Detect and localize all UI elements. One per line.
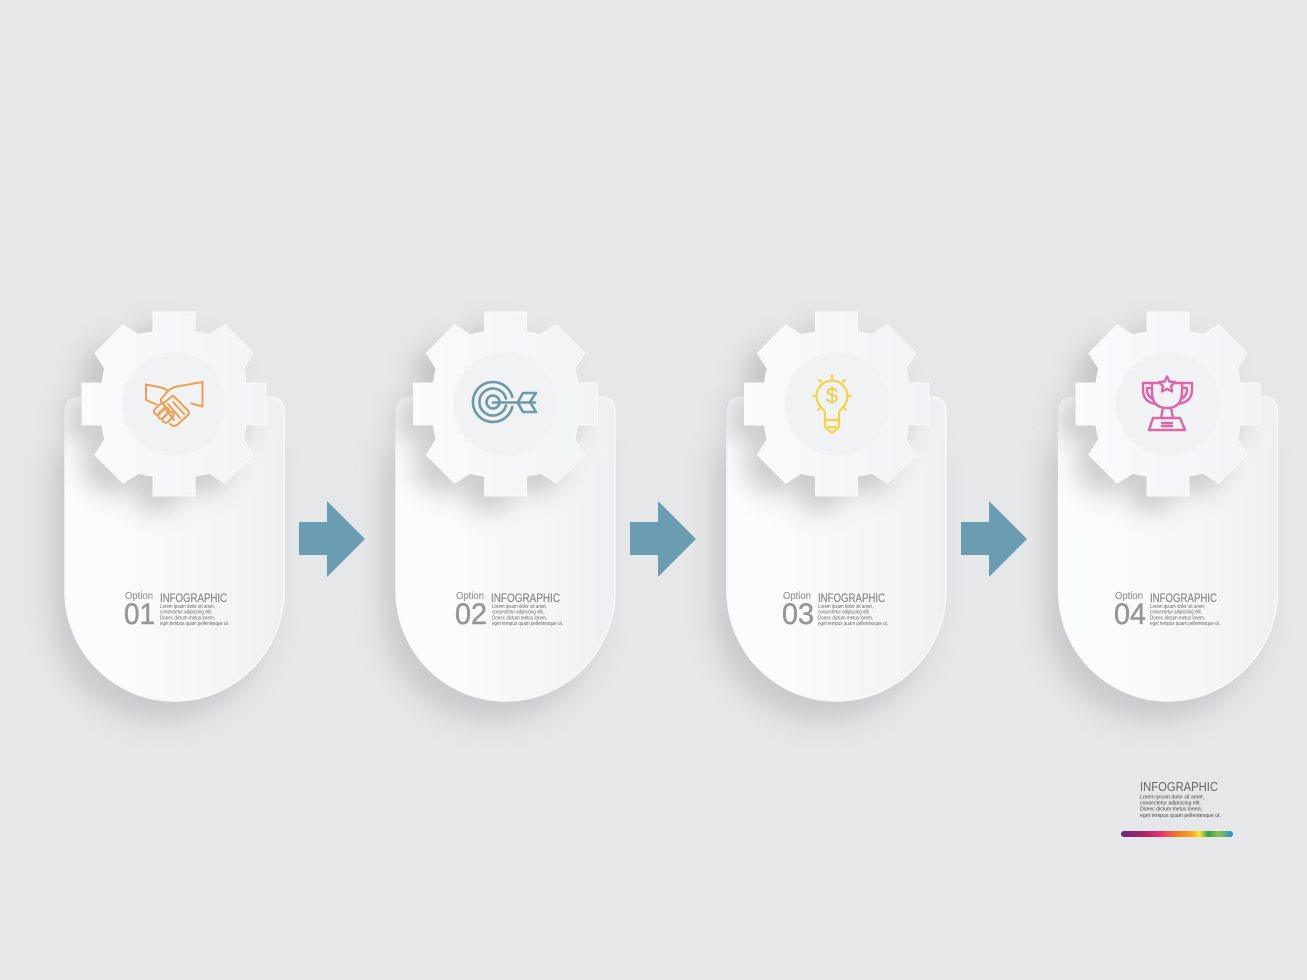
icon: light bulb with dollar: $ [826, 383, 838, 408]
gear 1 [65, 312, 266, 511]
text: option 4: Lorem ipsum dolor sit amet, [1150, 604, 1205, 610]
text: option 2: 02 [455, 598, 487, 631]
step 3 [714, 312, 946, 721]
icon: handshake [146, 382, 202, 426]
panel: card 3 [714, 397, 946, 721]
text: option 3: Lorem ipsum dolor sit amet, [818, 604, 873, 610]
step 4 [1046, 312, 1278, 721]
text: option 3: Donec dictum metus lorem, [818, 616, 873, 622]
text: option 3: INFOGRAPHIC [818, 593, 885, 605]
arrow 3 [961, 501, 1027, 577]
panel: card 4 [1046, 397, 1278, 721]
legend text: Donec dictum metus lorem, [1140, 806, 1202, 812]
step 1 [52, 312, 284, 721]
text: option 3: eget tempus quam pellentesque ut. [818, 621, 888, 627]
arrow 1 [299, 501, 365, 577]
text: option 4: consectetur adipiscing elit. [1150, 610, 1202, 616]
text: option 2 [455, 591, 563, 631]
gear 4 [1059, 312, 1260, 511]
panel: card 2 [383, 397, 615, 721]
text: option 4: INFOGRAPHIC [1150, 593, 1217, 605]
gear 2 [396, 312, 598, 511]
gear 3 [728, 312, 928, 511]
rainbow bar [1121, 831, 1233, 837]
text: option 3: Option [783, 591, 811, 602]
legend block [1121, 780, 1233, 837]
text: option 4 [1114, 591, 1220, 631]
legend text: consectetur adipiscing elit. [1140, 800, 1201, 806]
text: option 1: Donec dictum metus lorem, [160, 616, 215, 622]
text: option 2: consectetur adipiscing elit. [492, 610, 544, 616]
text: option 3: 03 [782, 598, 814, 631]
text: option 4: 04 [1114, 598, 1146, 631]
legend text: eget tempus quam pellentesque ut. [1140, 813, 1221, 819]
legend text: Lorem ipsum dolor sit amet, [1140, 794, 1204, 800]
text: option 3 [782, 591, 888, 631]
text: option 2: Donec dictum metus lorem, [492, 616, 547, 622]
text: option 2: INFOGRAPHIC [491, 593, 560, 605]
legend heading: INFOGRAPHIC [1140, 780, 1218, 794]
text: option 4: Donec dictum metus lorem, [1150, 616, 1205, 622]
icon: light bulb with dollar [813, 375, 851, 433]
arrow 2 [630, 501, 696, 577]
text: option 4: Option [1115, 591, 1143, 602]
panel: card 1 [52, 397, 284, 721]
legend text [1140, 794, 1221, 819]
text: option 1: eget tempus quam pellentesque ut. [160, 621, 229, 627]
text: option 1: Lorem ipsum dolor sit amet, [160, 604, 215, 610]
text: option 1: consectetur adipiscing elit. [160, 610, 212, 616]
text: option 2: Option [456, 591, 484, 602]
text: option 1: Option [125, 591, 153, 602]
text: option 2: eget tempus quam pellentesque ut. [492, 621, 563, 627]
icon: trophy [1143, 376, 1192, 430]
text: option 1: 01 [124, 598, 155, 631]
text: option 4: eget tempus quam pellentesque ut. [1150, 621, 1220, 627]
text: option 1: INFOGRAPHIC [160, 593, 227, 605]
icon: target [473, 382, 536, 422]
text: option 2: Lorem ipsum dolor sit amet, [492, 604, 547, 610]
text: option 3: consectetur adipiscing elit. [818, 610, 870, 616]
step 2 [383, 312, 615, 721]
text: option 1 [124, 591, 229, 631]
